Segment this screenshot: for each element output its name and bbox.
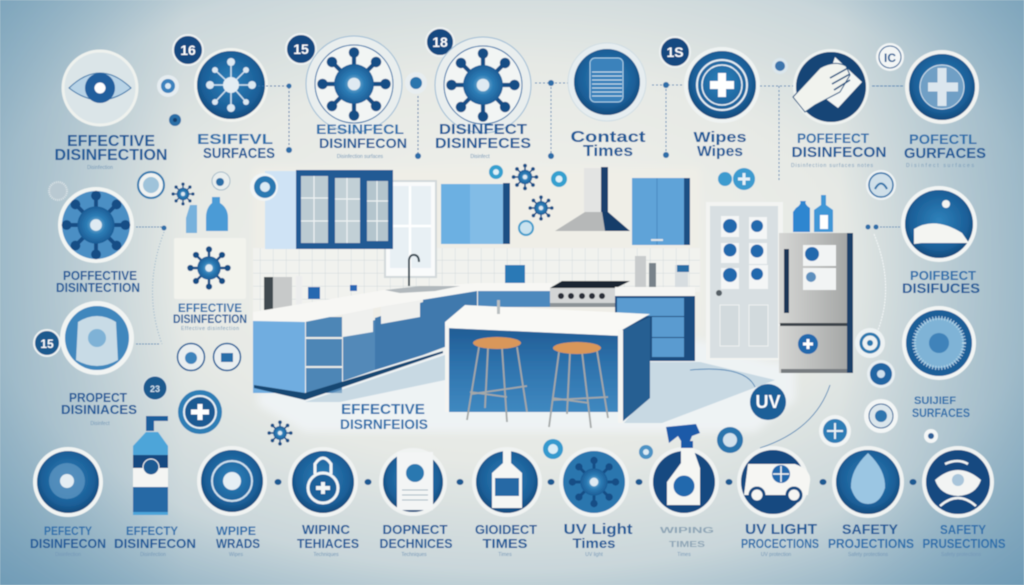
icon: badge 16 [173,35,203,65]
heading: disinfect disinfeces [435,122,531,160]
tile backsplash [253,248,700,312]
heading: poifbect disifuces: DISIFUCES [902,280,980,296]
panel: left column [34,172,293,446]
connector [872,85,904,87]
icon: badge 15: 15 [40,337,54,351]
base cabinets [253,289,550,400]
connector dot [910,479,916,485]
label: gioidect times: TIMES [482,536,528,551]
stool right [549,342,608,428]
label: safety prusections: Safety protections [941,552,982,558]
icon: fingerprint circle [33,447,103,517]
heading: suijief surfaces: SURFACES [912,406,970,420]
connector [415,96,421,159]
heading: esiffvl surfaces: ESIFFVL [197,131,273,148]
label: dopnect dechnices: DECHNICES [380,536,453,551]
icon: target small [855,328,885,358]
stove [550,281,630,307]
icon: virus target 2 [435,37,531,133]
stool left [467,337,527,422]
icon: blue bottle [206,197,228,231]
icon: virus upper [512,164,538,190]
label: wipinc tehiaces: WIPINC [302,522,351,537]
island [445,300,650,423]
icon: small ring [543,439,563,459]
icon: small round glass [138,172,164,198]
heading: propect disiniaces: DISINIACES [61,402,137,417]
icon: badge 1S [660,37,690,67]
heading: effective disinfection: DISINFECTION [54,147,168,164]
icon: small dark badge: 23 [150,384,160,394]
heading: pofectl gurfaces: POFECTL [909,131,977,147]
panel: effective disinfection card: DISINFECTION [173,314,247,326]
label: wpipe wrads: Wipes [229,552,243,558]
icon: small link [157,75,179,97]
heading: poifbect disifuces: POIFBECT [910,268,976,283]
heading: effective disinfection: EFFECTIVE [67,133,155,150]
label: pefecty disinfecon: DISINFECON [30,536,106,551]
label: faded times [660,526,714,558]
heading: suijief surfaces: SUIJIEF [914,395,956,407]
icon: small badge washing [866,170,896,200]
icon: biohazard mask [922,446,994,518]
panel: effective disinfection card: EFFECTIVE [178,303,242,315]
label: uv light times [564,521,633,558]
connector dot [456,479,464,485]
label: uv light procections: UV LIGHT [745,521,817,538]
label: wpipe wrads: WRADS [216,537,260,551]
heading: contact times: Contact [570,129,646,146]
icon: star badge [819,415,851,447]
heading: pofefect disinfecon: Disinfection surfaces notes [791,163,874,169]
heading: disinfect disinfeces: Disinfect [470,154,490,160]
heading: poffective disintection [56,268,140,295]
icon: badge 1S: 1S [666,44,684,60]
icon: plus circle [178,390,222,434]
icon: small drop [212,172,230,190]
upper cabinet centre [441,183,510,244]
panel: floating virus icons [250,164,567,235]
upper cabinet with glass doors [265,170,393,249]
floor shadows [305,355,775,423]
heading: suijief surfaces [912,395,970,420]
label: pefecty disinfecon: PEFECTY [44,524,92,538]
icon: small blue ring right [551,171,567,187]
label: gioidect times [475,522,537,558]
icon: vehicle [737,446,810,518]
label: uv light procections [741,521,819,558]
heading: propect disiniaces: Disinfect [90,421,110,427]
icon: wipe disc [197,446,267,516]
icon: vase [186,205,197,233]
label: gioidect times: Times [498,552,512,558]
label: uv light procections: PROCECTIONS [741,536,819,551]
floor text: DISRNFEIOIS [340,416,428,432]
heading: disinfect disinfeces: DISINFECES [435,136,531,152]
icon: bottle [133,416,168,515]
label: wpipe wrads [216,524,260,558]
icon: small dot badge [772,58,788,74]
label: safety projections [828,521,914,558]
heading: poifbect disifuces [902,268,980,296]
label: faded times: Times [677,552,691,558]
icon: badge 16: 16 [180,42,196,58]
heading: pofefect disinfecon: POFEFECT [797,130,869,146]
heading: wipes wipes: Wipes [694,129,746,146]
label: faded times: WIPING [660,526,714,535]
heading: propect disiniaces: PROPECT [69,390,127,405]
label: effecty disinfecon: Disinfection [140,552,166,558]
label: safety projections: Safety protections [848,552,889,558]
heading: eesinfecl disinfecon: DISINFECON [319,135,407,151]
heading: pofefect disinfecon [791,130,886,169]
label: dopnect dechnices: Techniques [401,552,427,558]
label: pefecty disinfecon [30,524,106,558]
connector dot [636,479,642,485]
heading: pofefect disinfecon: DISINFECON [792,144,886,161]
heading: wipes wipes [694,129,746,160]
label: safety prusections: SAFETY [940,522,986,537]
panel: bottom row [30,416,1006,558]
icon: badge 15 [34,330,60,356]
kitchen wall [254,168,700,333]
icon: badge 18 [426,28,454,56]
label: dopnect dechnices [380,522,453,558]
icon: uv badge: UV [755,392,781,412]
label: faded times: TIMES [669,540,706,549]
icon: contact times [568,43,646,121]
icon: plus circle [684,47,760,123]
connector [535,80,572,159]
icon: uv badge [750,384,786,420]
heading: contact times [570,129,646,160]
label: effecty disinfecon: EFFECTY [126,524,178,538]
icon: small eye [169,114,181,126]
panel: right column [690,168,980,453]
bottom labels [30,521,1006,558]
label: wpipe wrads: WPIPE [216,524,256,538]
panel: effective disinfection card: Effective disinfection [181,326,239,332]
label: wipinc tehiaces [297,522,359,558]
icon: virus cut out [171,182,195,206]
floor text: EFFECTIVE [341,401,425,418]
icon: virus target [306,36,402,132]
heading: esiffvl surfaces: SURFACES [203,145,275,162]
label: uv light procections: UV protection [761,552,791,558]
icon: eye [63,51,137,125]
connector [652,82,685,158]
icon: small dot [924,429,938,443]
icon: shield drop [832,446,904,518]
icon: small blue ring [489,165,503,179]
label: uv light times: Times [572,536,616,551]
icon: badge IC: IC [884,51,896,65]
heading: esiffvl surfaces [197,131,275,162]
connector dot [548,479,554,485]
range hood [555,167,630,231]
icon: small badge [639,445,653,459]
upper cabinet right [632,178,690,245]
floor [258,340,795,432]
sink [385,286,460,293]
icon: virus circle [58,187,134,263]
heading: poffective disintection: POFFECTIVE [63,268,137,283]
heading: wipes wipes: Wipes [697,143,743,160]
connector dot [726,479,732,485]
heading: pofectl gurfaces: Disinfect surfaces [906,163,974,169]
panel: top row [54,28,986,182]
icon: hand wiping [793,49,869,125]
heading: pofectl gurfaces [904,131,986,169]
label: safety projections: PROJECTIONS [828,536,914,551]
panel: effective disinfection card [173,238,247,370]
label: dopnect dechnices: DOPNECT [382,522,448,537]
icon: document [379,448,447,516]
refrigerator [779,233,853,373]
label: uv light times: UV light [585,552,603,558]
icon: faded dots [49,182,67,200]
label: pefecty disinfecon: Disinfection [55,552,81,558]
icon: badge IC [876,43,904,71]
heading: propect disiniaces [61,390,137,427]
faucet [409,255,419,286]
connector [258,84,292,153]
countertop [253,283,552,322]
label: gioidect times: GIOIDECT [475,522,537,537]
icon: badge 15 [286,34,316,64]
icon: small face badge [717,427,743,453]
icon: container circle [60,301,134,375]
label: uv light times: UV Light [564,521,633,538]
icon: bottle circle [472,447,542,517]
connector arcs [690,369,830,448]
window [385,181,436,277]
connector dot [274,479,282,485]
heading: eesinfecl disinfecon [316,121,407,160]
heading: pofectl gurfaces: GURFACES [904,145,986,162]
label: safety projections: SAFETY [842,521,899,537]
connector [866,224,900,330]
label: wipinc tehiaces: TEHIACES [297,536,359,551]
connector dot [364,479,372,485]
heading: eesinfecl disinfecon: EESINFECL [316,121,404,137]
icon: surface molecule [194,48,268,122]
icon: spray bottle [649,424,719,517]
icon: small blue badges near door [718,168,755,190]
connector [760,86,795,182]
label: safety prusections [922,522,1006,558]
icon: small scan [405,72,427,94]
icon: uv virus [559,447,629,517]
heading: poffective disintection: DISINTECTION [56,280,140,295]
icon: hand circle [901,186,977,262]
icon: badge 18: 18 [432,34,448,50]
bottles on refrigerator [793,195,833,232]
icon: top left cabinet badge [250,173,278,201]
door with posters [706,202,783,360]
icon: badge 15: 15 [293,41,309,57]
heading: disinfect disinfeces: DISINFECT [439,122,527,138]
icon: small dark badge [143,376,167,400]
icon: small virus [267,420,293,446]
connector [136,226,166,344]
label: safety prusections: PRUSECTIONS [922,536,1006,551]
label: effecty disinfecon [114,524,196,558]
heading: eesinfecl disinfecon: Disinfection surfaces [337,154,384,160]
countertop items [264,256,689,310]
icon: small circle [867,360,895,388]
connector dot [820,479,826,485]
icon: particle circle [902,306,976,380]
icon: shield plus [905,50,979,124]
kitchen scene [253,167,853,432]
heading: effective disinfection [54,133,168,171]
icon: virus lower [528,195,554,221]
heading: effective disinfection: Disinfection [87,165,113,171]
label: effecty disinfecon: DISINFECON [114,536,196,551]
icon: small ring [864,399,898,433]
icon: lock plus [288,447,358,517]
heading: contact times: Times [583,143,633,160]
label: wipinc tehiaces: Techniques [313,552,339,558]
floor text [340,401,428,432]
right base cabinets [615,287,695,361]
icon: faded ring [519,221,533,235]
